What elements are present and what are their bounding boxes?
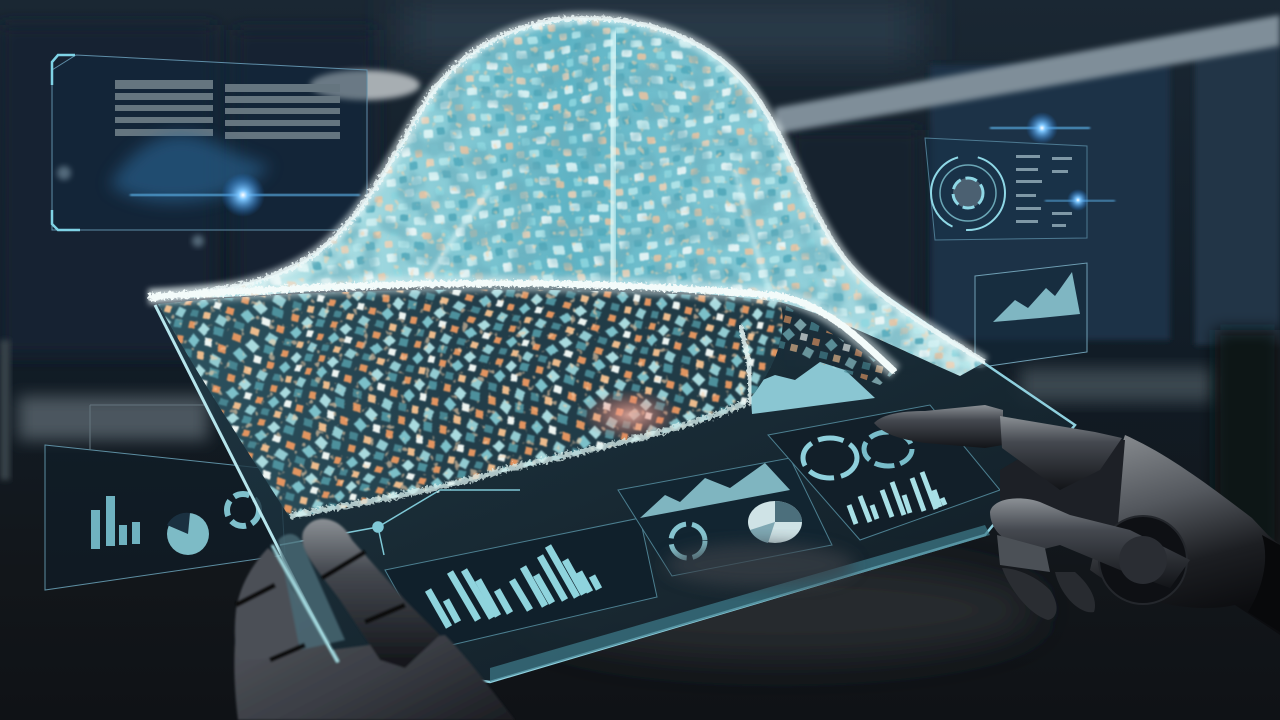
red glow (580, 389, 680, 441)
palm and wrist (234, 576, 515, 720)
pie (748, 501, 802, 543)
area chart (993, 272, 1080, 322)
gauge small (864, 432, 912, 466)
icon: robot left hand (234, 519, 515, 720)
white hem of lower surface (290, 403, 745, 516)
ring gauge (227, 494, 259, 526)
dome outline soft halo (150, 18, 985, 362)
index finger (874, 405, 1122, 490)
connector lines (280, 490, 520, 555)
radar ring (931, 156, 1005, 230)
pie chart (167, 513, 209, 555)
glass edge over hand (272, 545, 338, 662)
light flare: side (1045, 189, 1115, 211)
wrist band (1248, 535, 1280, 632)
area chart (640, 463, 790, 518)
panel: right area chart hologram (975, 263, 1087, 368)
joint seams (236, 552, 405, 660)
bars (849, 472, 945, 524)
panel: upper-left hologram (52, 55, 367, 247)
dome outline sparkle (150, 18, 985, 362)
thumb socket cap (1119, 536, 1167, 584)
lower finger: left (1002, 568, 1057, 620)
text lines: left column (115, 80, 213, 136)
data lines (1016, 155, 1072, 227)
lower finger: right (1055, 572, 1095, 612)
finger: outer (235, 548, 300, 660)
glass view through hand (278, 534, 345, 650)
dome central rib (612, 30, 615, 285)
icon: robot right hand (874, 405, 1280, 635)
tablet: glass sheet (155, 265, 1075, 682)
palm shadow (1000, 440, 1125, 560)
bright wave edge (148, 283, 895, 372)
panel: lower-left hologram (45, 405, 285, 590)
hologram: lower mosaic surface (150, 280, 790, 520)
area chart: upper tablet (750, 362, 875, 414)
wrist socket (1099, 516, 1187, 604)
wave edge haze (148, 283, 895, 372)
dome left rib (425, 190, 490, 285)
chart module: area and pies (618, 458, 832, 576)
chart module: gauges and bars (768, 405, 1000, 540)
gauge (803, 438, 857, 478)
panel: upper-right radar hologram (925, 112, 1115, 240)
middle finger (990, 498, 1190, 588)
keyboard reflection (665, 543, 855, 587)
dome right rib (735, 170, 770, 290)
forearm (1090, 435, 1280, 635)
light flare (130, 173, 360, 217)
chart module: bars (385, 518, 657, 650)
hologram cloud (110, 134, 270, 202)
donut (671, 524, 705, 558)
light flare: top (990, 112, 1090, 144)
right fold rib (740, 325, 751, 405)
bar chart (91, 496, 140, 549)
hologram: right mosaic flank (770, 302, 895, 385)
text lines: right column (225, 84, 340, 139)
finger: main (302, 519, 440, 668)
knuckle section (997, 535, 1050, 572)
hologram: bell dome (140, 10, 1000, 405)
